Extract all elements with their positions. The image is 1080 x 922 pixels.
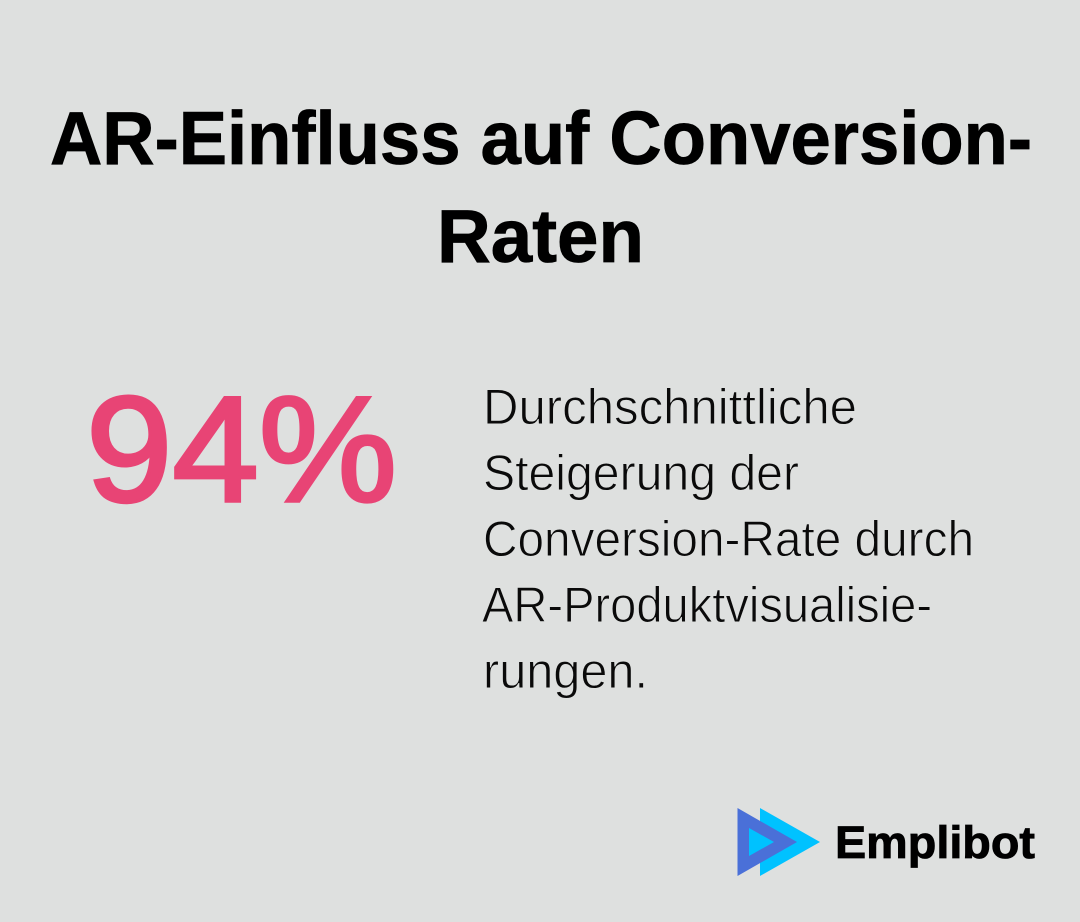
description text: Steigerung der [483, 445, 799, 501]
icon: play triangles [738, 808, 820, 876]
title: Raten [437, 194, 644, 278]
description text: Conversion-Rate durch [483, 511, 974, 567]
title: AR-Einfluss auf Conversion- [50, 96, 1032, 180]
title [50, 96, 1032, 278]
description text: rungen. [483, 643, 648, 699]
description text: AR-Produktvisualisie- [482, 577, 932, 633]
logo wordmark: Emplibot [835, 817, 1035, 868]
logo: Emplibot [738, 808, 1035, 876]
description text [482, 379, 974, 699]
big statistic: 94%: 94% [86, 365, 397, 533]
description text: Durchschnittliche [483, 379, 857, 435]
